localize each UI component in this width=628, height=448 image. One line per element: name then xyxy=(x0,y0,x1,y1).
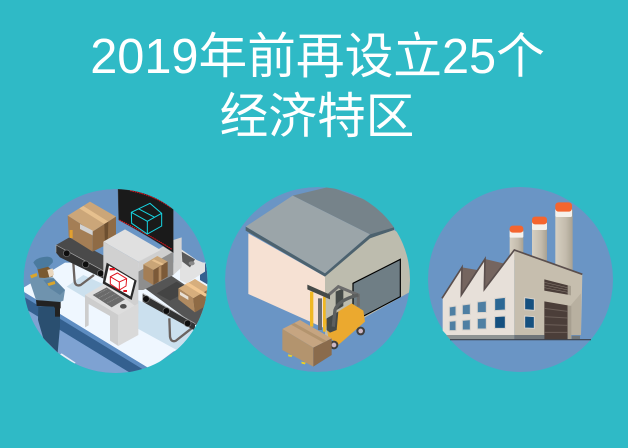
vent grille xyxy=(544,279,571,295)
back conveyor belt xyxy=(56,237,104,287)
chimneys xyxy=(510,202,573,273)
inspection desk with keyboard xyxy=(85,283,138,346)
illustration: warehouse with forklift xyxy=(225,187,415,372)
side control unit xyxy=(180,248,205,283)
title: 经济特区 xyxy=(220,90,414,144)
scanned box in machine xyxy=(143,256,168,285)
roller door xyxy=(544,301,571,339)
illustration: factory with chimneys xyxy=(428,187,613,372)
small monitor with red box xyxy=(103,263,137,300)
ground line xyxy=(450,338,591,341)
security officer xyxy=(29,257,65,353)
factory building xyxy=(442,250,582,339)
right conveyor belt xyxy=(143,273,210,341)
factory windows xyxy=(449,297,534,331)
scanner machine xyxy=(103,229,182,313)
warehouse building xyxy=(246,187,415,340)
floor platform xyxy=(24,262,208,373)
forklift xyxy=(307,285,365,349)
box on right of belt xyxy=(178,279,210,312)
warehouse door xyxy=(353,259,400,322)
scanner monitor with cyan box xyxy=(118,189,173,253)
title: 2019年前再设立25个 xyxy=(90,30,545,84)
large cardboard box xyxy=(68,202,116,252)
illustration: customs inspection conveyor xyxy=(20,189,210,385)
cardboard box on forks xyxy=(282,320,332,367)
title xyxy=(90,30,545,144)
